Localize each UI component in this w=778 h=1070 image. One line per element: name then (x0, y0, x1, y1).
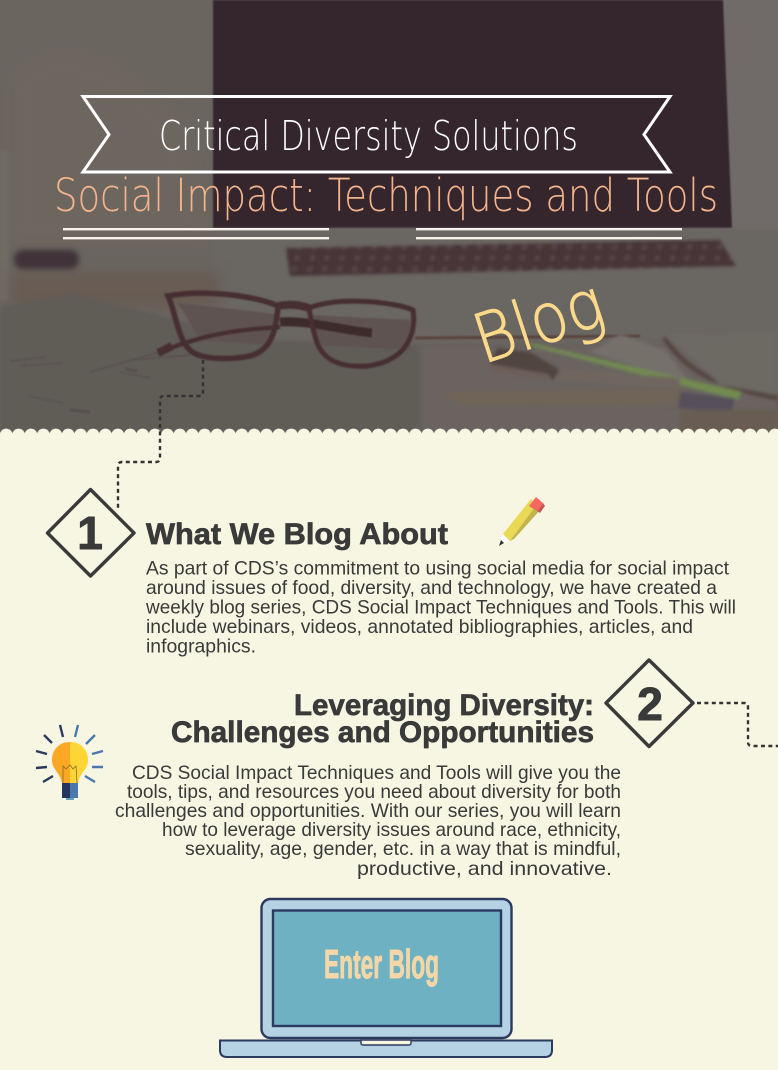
heading: Leveraging Diversity: Leveraging Diversity: (294, 689, 594, 722)
wall glow (10, 54, 210, 240)
dotted connector from step 2 (697, 703, 778, 746)
title: Critical Diversity Solutions (159, 112, 578, 160)
diamond badge 1 (48, 490, 134, 576)
paragraph: leveraging diversity: challenges and opportunities. With our series, you will learn (115, 800, 621, 822)
paragraph: leveraging diversity: productive, and innovative. (357, 858, 612, 880)
paragraph: leveraging diversity: how to leverage diversity issues around race, ethnicity, (162, 819, 621, 841)
glasses (158, 293, 414, 366)
diamond badge 2 (606, 660, 693, 746)
paragraph: what we blog about: As part of CDS’s commitment to using social media for social impact (146, 558, 730, 580)
dark object left (14, 250, 79, 269)
icon: light bulb (36, 725, 103, 800)
dotted connector to step 1 (118, 360, 203, 510)
monitor base area (215, 228, 731, 229)
paper sheet (2, 304, 418, 432)
laptop: enter blog button (220, 899, 552, 1057)
heading: Leveraging Diversity (171, 689, 594, 749)
right desk paper (420, 345, 778, 434)
icon: pencil (499, 497, 545, 546)
diamond badge 1: 1 (77, 507, 103, 559)
paragraph: leveraging diversity: tools, tips, and resources you need about diversity for both (127, 781, 621, 803)
hero photo: desk with monitor, keyboard and glasses (0, 0, 778, 440)
pen and marker objects (459, 334, 778, 432)
desk papers sketch (24, 358, 143, 413)
paragraph: leveraging diversity: sexuality, age, gender, etc. in a way that is mindful, (185, 838, 621, 860)
ribbon banner outline (83, 96, 670, 172)
heading: What We Blog About: What We Blog About (146, 518, 448, 551)
monitor screen (213, 0, 732, 228)
paragraph: leveraging diversity: CDS Social Impact Techniques and Tools will give you the (132, 762, 621, 784)
paragraph: what we blog about: around issues of food, diversity, and technology, we have created a (146, 577, 717, 599)
paragraph: leveraging diversity (115, 762, 621, 880)
desk edge line (415, 336, 640, 338)
handwritten Blog label: Blog (464, 264, 614, 380)
scalloped edge of hero (0, 428, 778, 442)
diamond badge 2: 2 (637, 678, 663, 730)
paragraph: what we blog about (145, 558, 736, 658)
paragraph: what we blog about: infographics. (146, 636, 256, 658)
warm desk left (12, 274, 220, 306)
heading: Leveraging Diversity: Challenges and Opportunities (171, 716, 594, 749)
double rule right (416, 228, 682, 239)
paragraph: what we blog about: weekly blog series, CDS Social Impact Techniques and Tools. This will (145, 596, 736, 618)
button label: Enter Blog (324, 941, 439, 987)
paragraph: what we blog about: include webinars, videos, annotated bibliographies, articles, and (146, 616, 693, 638)
keyboard (286, 240, 736, 276)
double rule left (63, 228, 329, 239)
